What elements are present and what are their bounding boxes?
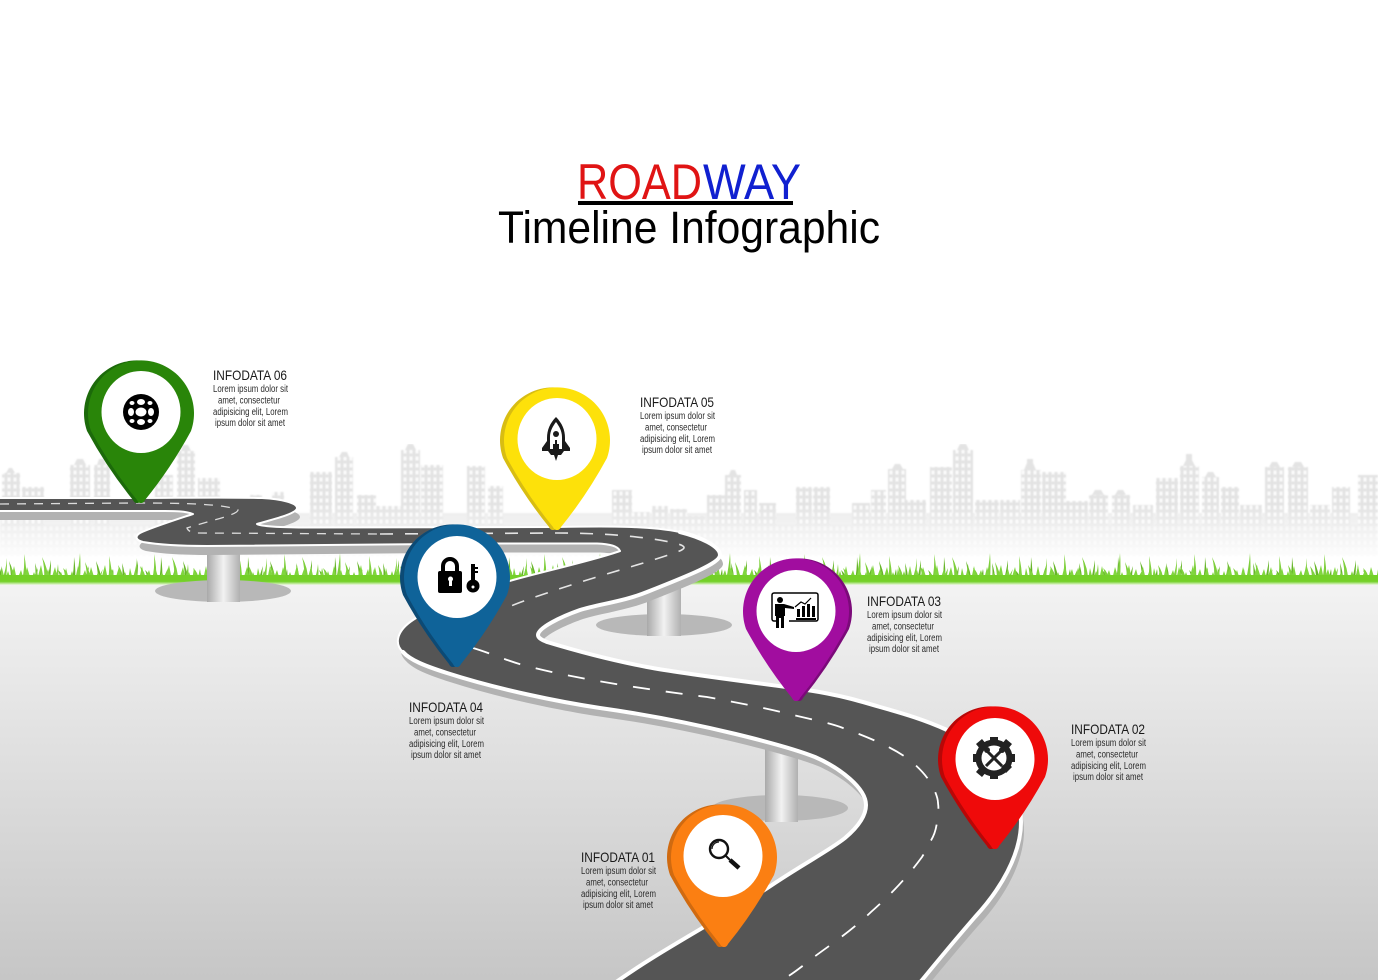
label: infodata 05: INFODATA 05	[640, 394, 714, 410]
label: infodata 05: Lorem ipsum dolor sit	[640, 411, 715, 422]
pin 01: orange	[667, 804, 777, 947]
label: infodata 01: Lorem ipsum dolor sit	[581, 866, 656, 877]
pin 03: purple	[743, 558, 852, 701]
label: infodata 04	[409, 699, 484, 761]
label: infodata 05: amet, consectetur	[645, 422, 708, 434]
icon: padlock and key	[438, 559, 480, 593]
label: infodata 03: INFODATA 03	[867, 593, 941, 609]
label: infodata 01: INFODATA 01	[581, 849, 655, 865]
title: WAY	[703, 154, 801, 210]
icon: gear with tools	[973, 737, 1015, 779]
label: infodata 04: adipisicing elit, Lorem	[409, 739, 484, 750]
pin 05: yellow	[500, 387, 610, 530]
grass strip	[0, 552, 1378, 585]
label: infodata 06: adipisicing elit, Lorem	[213, 407, 288, 418]
label: infodata 02: Lorem ipsum dolor sit	[1071, 738, 1146, 749]
city skyline	[0, 444, 1378, 557]
label: infodata 02	[1071, 721, 1146, 783]
label: infodata 04: Lorem ipsum dolor sit	[409, 716, 484, 727]
title	[498, 154, 880, 253]
label: infodata 05: adipisicing elit, Lorem	[640, 434, 715, 445]
label: infodata 02: amet, consectetur	[1076, 750, 1139, 760]
icon: globe	[123, 394, 159, 430]
label: infodata 03: adipisicing elit, Lorem	[867, 633, 942, 644]
support pillar 3	[712, 745, 848, 822]
label: infodata 05	[640, 394, 715, 456]
label: infodata 02: INFODATA 02	[1071, 721, 1145, 737]
label: infodata 01: ipsum dolor sit amet	[583, 900, 653, 911]
icon: presenter with chart	[772, 593, 818, 629]
label: infodata 01: amet, consectetur	[586, 878, 649, 888]
label: infodata 06: INFODATA 06	[213, 367, 287, 383]
support pillar 1	[155, 545, 291, 602]
winding road	[0, 498, 1024, 980]
label: infodata 03: Lorem ipsum dolor sit	[867, 610, 942, 621]
label: infodata 06: ipsum dolor sit amet	[215, 418, 285, 429]
label: infodata 06: amet, consectetur	[218, 396, 281, 406]
icon: rocket	[542, 417, 570, 461]
label: infodata 03: amet, consectetur	[872, 622, 935, 632]
pin 02: red	[938, 706, 1048, 849]
label: infodata 04: amet, consectetur	[414, 728, 477, 738]
pin 06: green	[84, 360, 194, 503]
label: infodata 01: adipisicing elit, Lorem	[581, 889, 656, 900]
label: infodata 04: ipsum dolor sit amet	[411, 750, 481, 761]
label: infodata 02: ipsum dolor sit amet	[1073, 772, 1143, 783]
background: white sky	[0, 0, 1378, 582]
label: infodata 01	[581, 849, 656, 911]
title: ROAD	[577, 154, 702, 210]
label: infodata 03	[867, 593, 942, 655]
support pillar 2	[596, 585, 732, 636]
label: infodata 04: INFODATA 04	[409, 699, 483, 715]
label: infodata 06	[213, 367, 288, 429]
label: infodata 03: ipsum dolor sit amet	[869, 644, 939, 655]
label: infodata 02: adipisicing elit, Lorem	[1071, 761, 1146, 772]
title: Timeline Infographic	[498, 202, 880, 253]
ground	[0, 582, 1378, 980]
icon: magnifying glass	[710, 840, 739, 868]
label: infodata 06: Lorem ipsum dolor sit	[213, 384, 288, 395]
label: infodata 05: ipsum dolor sit amet	[642, 445, 712, 456]
pin 04: blue	[400, 524, 510, 667]
